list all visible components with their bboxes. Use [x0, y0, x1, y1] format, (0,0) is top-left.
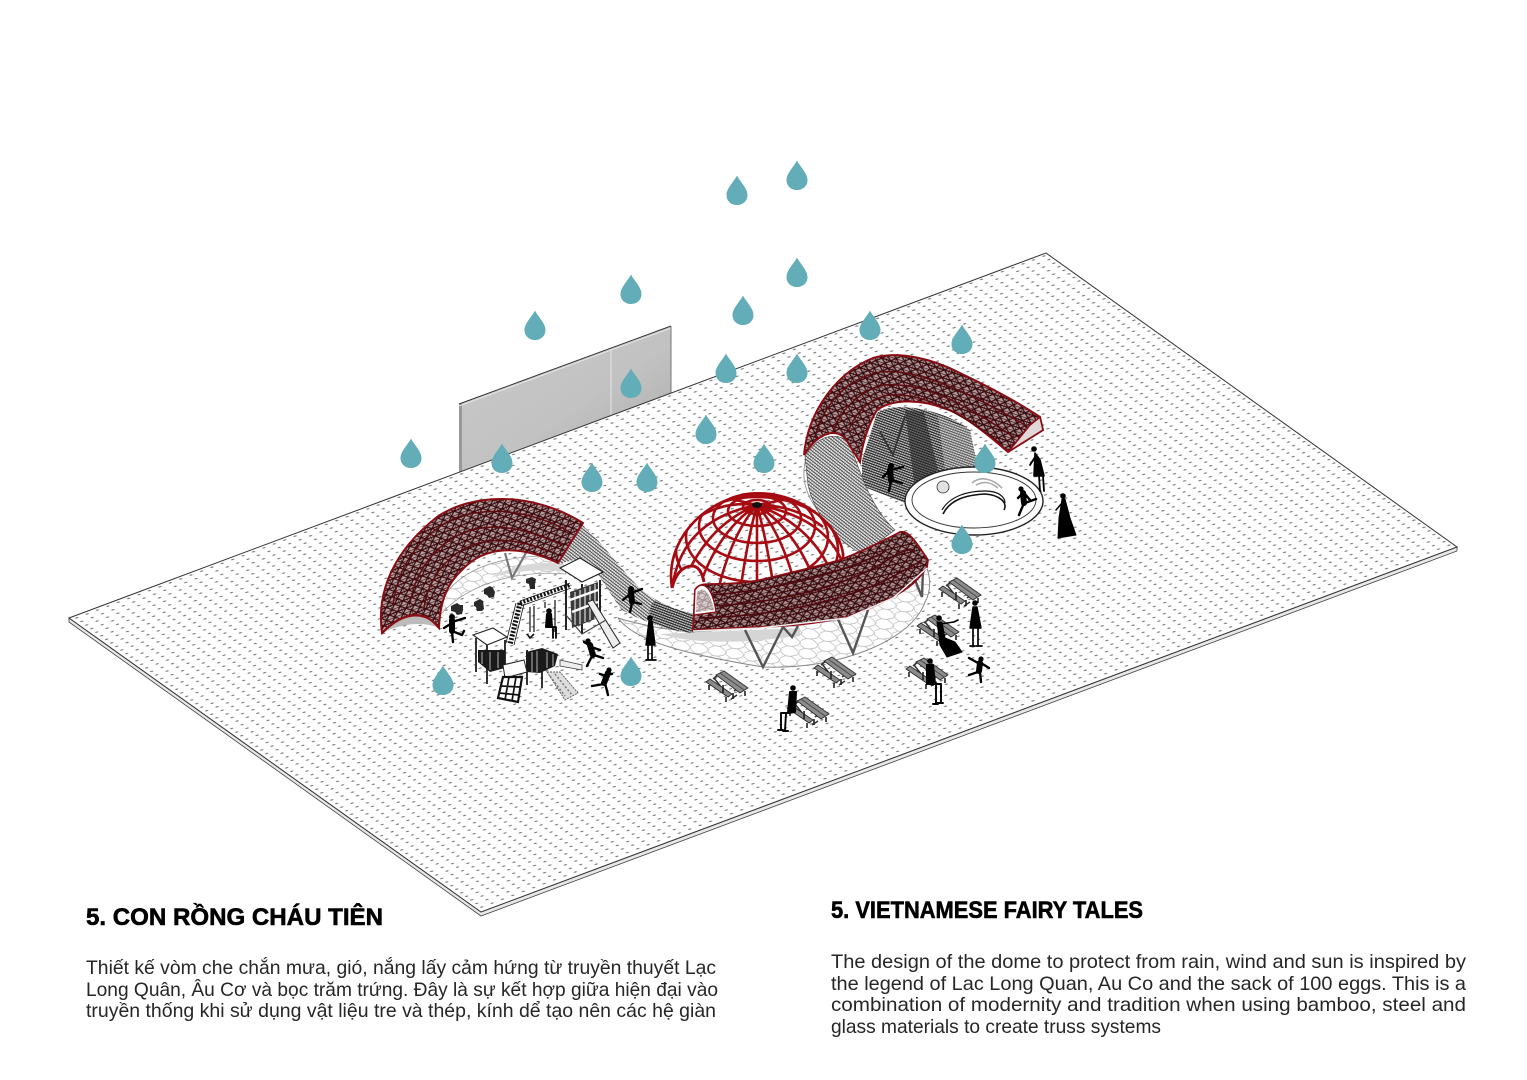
child running by drop [592, 667, 612, 695]
person kicking under canopy [883, 463, 903, 491]
playground monkey bars and swing [506, 583, 571, 645]
child in pool [1018, 486, 1036, 515]
woman by pool [1030, 446, 1044, 491]
text block: Vietnamese description: truyền thống khi sử dụng vật liệu tre và thép, kính dể tạo nên các hệ giàn [86, 1000, 716, 1022]
text block: Vietnamese description: Thiết kế vòm che chắn mưa, gió, nắng lấy cảm hứng từ truyền thuyết Lạc [86, 956, 716, 979]
left canopy lattice [381, 499, 583, 633]
people silhouettes [444, 446, 1076, 731]
child jumping right [969, 656, 989, 682]
back wall panel [459, 326, 671, 473]
paving: main stone ring [618, 566, 930, 667]
platform ground with dots [69, 253, 1457, 916]
playground upper tower and slide [560, 558, 620, 648]
grey hatched ribbon left [558, 524, 694, 633]
shaded inner hatch right [862, 407, 978, 503]
woman in long dress [1056, 493, 1076, 538]
axonometric infographic [68, 160, 1466, 1037]
red lattice dome [672, 494, 842, 583]
grey hatched ribbon right [805, 436, 895, 554]
right canopy lattice [804, 355, 1043, 462]
text block: English description [831, 951, 1466, 1038]
ribbon struts behind canopy [880, 416, 905, 455]
pool ellipse with sculpture [905, 467, 1043, 535]
seated person on front bench [778, 685, 796, 731]
seated person at front bench [927, 658, 943, 704]
rain drops [400, 160, 996, 695]
text block: Vietnamese description: Long Quân, Âu Cơ và bọc trăm trứng. Đây là sự kết hợp giữa hiện đại vào [86, 978, 718, 1001]
picnic benches [706, 578, 981, 728]
playground lower hut [473, 628, 558, 688]
text block: Vietnamese description [86, 956, 718, 1022]
text block: English description: The design of the dome to protect from rain, wind and sun is inspired by [831, 951, 1466, 973]
seated woman with dress [936, 615, 962, 657]
child running near slide [584, 638, 603, 666]
heading: Vietnamese title: 5. CON RỒNG CHÁU TIÊN [86, 903, 383, 931]
small sculptures in left court [451, 577, 536, 615]
playground climbing net and wall [498, 660, 582, 702]
person leaping left [444, 614, 465, 642]
middle canopy lattice [693, 532, 928, 631]
standing person [646, 615, 656, 660]
heading: English title: 5. VIETNAMESE FAIRY TALES [831, 897, 1143, 924]
dome outline [671, 493, 843, 588]
paving: left inner strip [436, 551, 566, 614]
standing person by bench [970, 600, 982, 646]
person seated on swing [546, 608, 556, 638]
person on hatched ribbon [623, 586, 642, 612]
text block: English description: combination of modernity and tradition when using bamboo, steel and [831, 994, 1466, 1016]
text block: English description: the legend of Lac Long Quan, Au Co and the sack of 100 eggs. This is a [831, 973, 1466, 995]
ground ring behind right ribbon [804, 458, 830, 525]
text block: English description: glass materials to create truss systems [831, 1016, 1161, 1038]
